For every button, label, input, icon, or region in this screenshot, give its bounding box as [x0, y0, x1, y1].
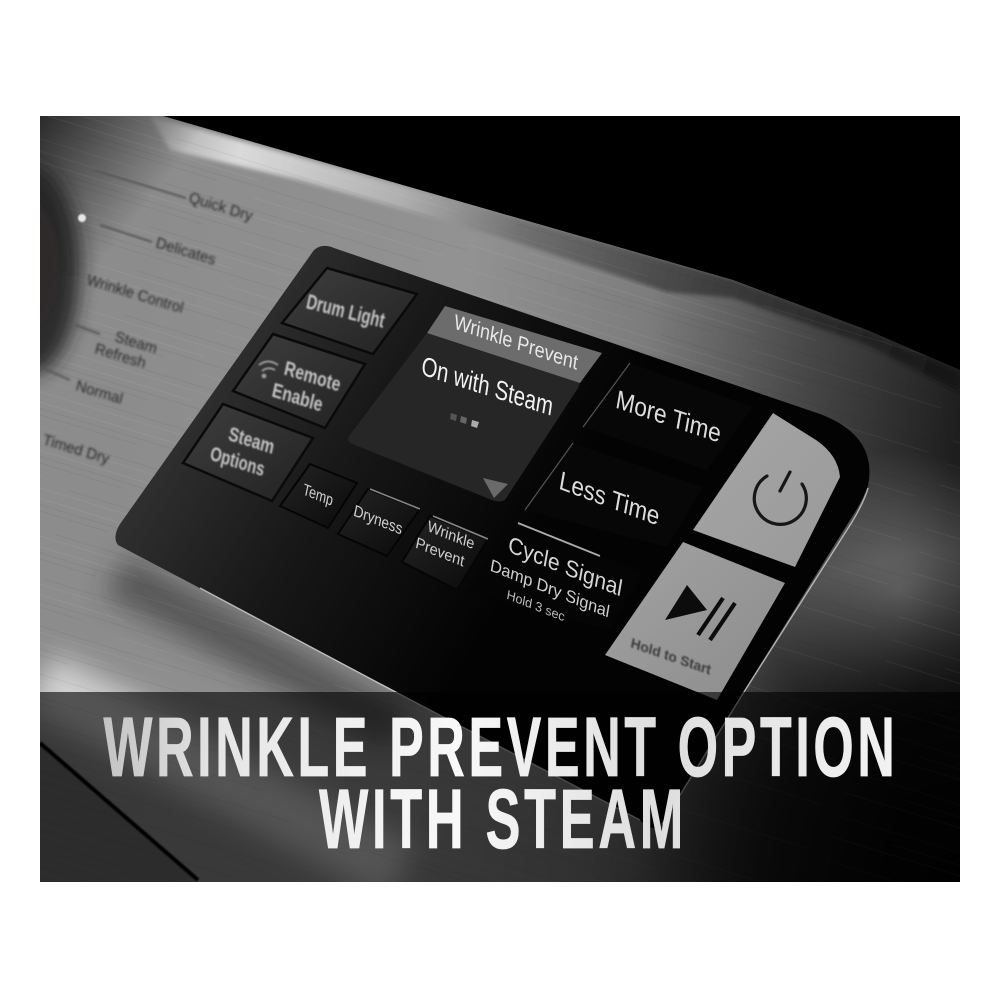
- label: Steam Refresh: Refresh: [93, 340, 148, 372]
- button: Steam Options: Options: [208, 443, 267, 481]
- button: Steam Options: Steam: [226, 423, 276, 459]
- panel lit edge: [200, 488, 868, 824]
- title line 2: WITH STEAM: [319, 772, 687, 866]
- title: [104, 700, 899, 866]
- screen body: [348, 333, 580, 502]
- dark caption strip: [40, 692, 960, 882]
- button: Temp: Temp: [301, 481, 335, 510]
- button: Cycle Signal: Hold 3 sec: [506, 587, 566, 625]
- bright lower-left band: [40, 682, 400, 872]
- button: Wrinkle Prevent: Prevent: [414, 535, 466, 571]
- button: Cycle Signal: Damp Dry Signal: [489, 556, 611, 622]
- label: Wrinkle Control: Wrinkle Control: [85, 271, 185, 317]
- shadow beside panel: [116, 575, 400, 730]
- label: Delicates: [100, 225, 217, 269]
- button: Drum Light: [282, 268, 417, 354]
- groove line: [40, 743, 198, 880]
- label: Steam Refresh: [75, 325, 159, 372]
- button: Remote Enable: Enable: [270, 380, 325, 417]
- brushed texture: [40, 116, 960, 692]
- button: Temp: [280, 464, 357, 528]
- hold to start text: Hold to Start: [630, 634, 713, 678]
- steel glow right of panel: [788, 467, 960, 692]
- button: Cycle Signal: [490, 522, 622, 621]
- cycle dial: [40, 162, 93, 386]
- screen main text: On with Steam: [420, 351, 555, 422]
- button: More Time: More Time: [614, 384, 723, 448]
- scroll arrow: [483, 478, 508, 498]
- button: Wrinkle Prevent: Wrinkle: [426, 518, 476, 553]
- button: Wrinkle Prevent: [402, 516, 488, 590]
- control panel: [115, 246, 869, 828]
- shaded top-left corner: [40, 116, 194, 262]
- icon: power: [754, 472, 806, 524]
- steel top roll: [150, 116, 960, 392]
- power button: [693, 413, 840, 567]
- icon: wifi: [259, 362, 278, 377]
- label: Normal: [46, 370, 124, 404]
- lower body below groove: [40, 743, 198, 882]
- label: Delicates: Delicates: [154, 234, 217, 269]
- button: More Time: [582, 362, 720, 442]
- display screen: [348, 306, 602, 502]
- button: Drum Light: Drum Light: [304, 290, 387, 333]
- label: Quick Dry: [94, 170, 255, 225]
- label: Quick Dry: Quick Dry: [187, 189, 255, 225]
- button: Steam Options: [183, 404, 313, 501]
- button: Dryness: [338, 489, 420, 556]
- button: Less Time: Less Time: [557, 465, 662, 531]
- button: Remote Enable: Remote: [282, 358, 343, 397]
- icon: play pause: [665, 585, 735, 640]
- button: Cycle Signal: Cycle Signal: [506, 531, 624, 601]
- play/pause button: [605, 542, 785, 700]
- button: Less Time: [524, 442, 658, 524]
- label: Normal: Normal: [74, 377, 125, 408]
- brushed steel body: [40, 116, 960, 882]
- dark lower right steel: [679, 572, 960, 882]
- button: Remote Enable: [233, 334, 365, 428]
- button: Dryness: Dryness: [352, 503, 404, 539]
- photo: washer control panel: [0, 116, 960, 882]
- dial cycle labels: [40, 170, 255, 468]
- page dots: [450, 413, 479, 428]
- label: Timed Dry: Timed Dry: [41, 431, 111, 468]
- label: Steam Refresh: Steam: [113, 328, 159, 357]
- screen header text: Wrinkle Prevent: [452, 311, 580, 375]
- screen header bar: [427, 306, 602, 383]
